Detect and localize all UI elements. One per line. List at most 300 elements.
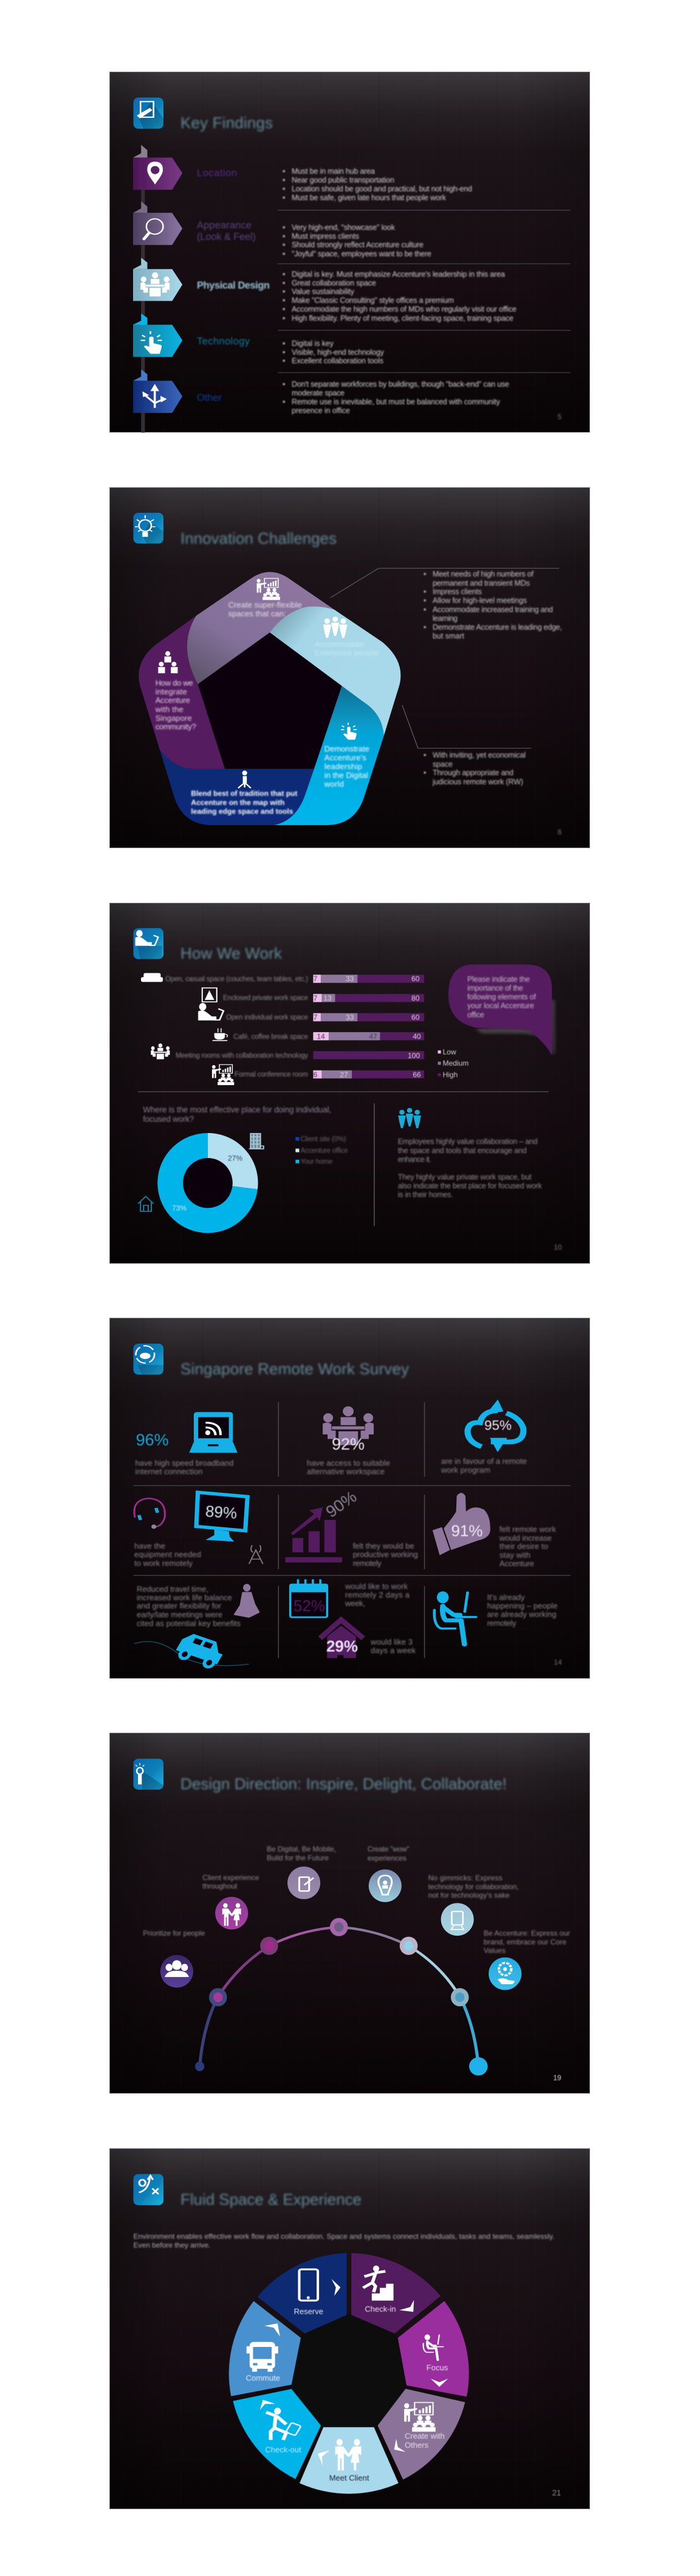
bullet lists: Visible, high-end technology bbox=[292, 348, 385, 357]
survey captions: would increase bbox=[499, 1533, 552, 1543]
arc labels: experiences bbox=[368, 1854, 407, 1862]
wheel labels bbox=[246, 2304, 448, 2482]
survey captions: their desire to bbox=[499, 1542, 548, 1551]
icon: touch bbox=[341, 723, 357, 740]
bar row labels: Enclosed private work space bbox=[223, 995, 308, 1002]
icon: chair person bbox=[238, 770, 251, 788]
icon: calendar bbox=[289, 1579, 328, 1617]
speech bubble text: importance of the bbox=[467, 984, 523, 992]
icon: coffee cup bbox=[213, 1028, 227, 1041]
category labels: Location bbox=[197, 168, 237, 179]
segment labels: Accenture's bbox=[324, 753, 366, 762]
page number: 10 bbox=[554, 1243, 562, 1252]
circle: people bbox=[160, 1955, 193, 1988]
wheel segment: focus bbox=[398, 2301, 469, 2397]
arc labels bbox=[143, 1845, 570, 1955]
callout bullets: judicious remote work (RW) bbox=[432, 778, 523, 786]
survey captions: remotely bbox=[487, 1619, 516, 1628]
callout bullets bbox=[424, 570, 562, 786]
segment labels: Accommodate bbox=[315, 639, 364, 648]
wheel segment: commute bbox=[229, 2301, 301, 2396]
intro text: Even before they arrive. bbox=[134, 2241, 210, 2250]
arc labels: Values bbox=[484, 1947, 506, 1955]
slide 5: design direction bbox=[109, 1733, 590, 2094]
slide 3 drawn shapes bbox=[133, 928, 555, 1233]
donut question bbox=[143, 1105, 331, 1123]
segment labels: leadership bbox=[324, 762, 362, 771]
header icon: document and pencil bbox=[133, 97, 163, 129]
title: Key Findings bbox=[180, 114, 273, 132]
bar values: 7 bbox=[314, 1013, 318, 1022]
donut legend labels bbox=[300, 1136, 348, 1165]
icon: house bbox=[318, 1616, 365, 1658]
bullet lists: • bbox=[283, 167, 285, 176]
legend labels: Medium bbox=[443, 1059, 468, 1067]
legend labels: High bbox=[443, 1070, 458, 1079]
bar row labels: Meeting rooms with collaboration technology bbox=[176, 1052, 308, 1060]
bullet lists: • bbox=[283, 250, 285, 258]
pentagon segment: purple bbox=[139, 615, 225, 769]
legend squares bbox=[438, 1050, 441, 1077]
takeaway text: enhance it. bbox=[398, 1155, 431, 1163]
bullet lists: Must impress clients bbox=[292, 232, 359, 241]
wheel labels: Commute bbox=[246, 2373, 280, 2382]
bullet lists: Accommodate the high numbers of MDs who regularly visit our office bbox=[292, 305, 516, 313]
bullet lists: "Joyful" space, employees want to be there bbox=[292, 250, 431, 258]
legend labels: Low bbox=[443, 1048, 456, 1057]
icon: presenter bbox=[257, 578, 280, 600]
callout bullets: Through appropriate and bbox=[433, 769, 513, 777]
speech bubble text bbox=[467, 975, 537, 1019]
survey captions: would like 3 bbox=[370, 1637, 413, 1646]
callout bullets: • bbox=[424, 605, 426, 614]
slide 6: fluid space and experience bbox=[109, 2148, 590, 2509]
bar values: 7 bbox=[314, 975, 318, 983]
bullet lists: Must be safe, given late hours that people work bbox=[292, 193, 447, 202]
callout connector lines bbox=[331, 568, 559, 748]
segment labels bbox=[155, 600, 379, 815]
bullet lists: • bbox=[283, 305, 285, 313]
segment labels: Enterprise people bbox=[315, 648, 379, 657]
icon: sofa bbox=[141, 973, 163, 982]
takeaway text bbox=[398, 1137, 542, 1199]
callout bullets: • bbox=[424, 769, 426, 777]
callout bullets: Allow for high-level meetings bbox=[433, 597, 527, 605]
survey captions: are already working bbox=[487, 1610, 557, 1619]
wheel labels: Check-in bbox=[365, 2304, 396, 2314]
tag: other bbox=[133, 369, 182, 413]
bullet lists: • bbox=[283, 185, 285, 193]
wheel labels: Others bbox=[405, 2441, 429, 2450]
slide 5 background bbox=[109, 1733, 590, 2094]
survey captions: week, bbox=[345, 1599, 365, 1608]
segment labels: Accenture on the map with bbox=[191, 798, 284, 807]
donut chart bbox=[157, 1133, 258, 1233]
icon: presenter bbox=[212, 1064, 234, 1085]
page number: 21 bbox=[552, 2489, 561, 2498]
category labels: (Look & Feel) bbox=[197, 231, 256, 242]
title: Design Direction: Inspire, Delight, Collaborate! bbox=[180, 1775, 507, 1793]
segment labels: world bbox=[324, 779, 344, 789]
segment labels: Blend best of tradition that put bbox=[191, 789, 297, 798]
pentagon segment: navy bbox=[160, 750, 314, 825]
bar values: 80 bbox=[411, 994, 420, 1002]
intro text bbox=[134, 2232, 554, 2250]
bullet lists: Great collaboration space bbox=[292, 279, 376, 287]
bar row labels: Open, casual space (couches, team tables, etc.) bbox=[165, 976, 308, 983]
survey captions: days a week bbox=[371, 1646, 416, 1655]
title: How We Work bbox=[180, 944, 283, 962]
bar values: 7 bbox=[314, 994, 318, 1002]
icon: office building bbox=[249, 1134, 264, 1149]
bullet lists: presence in office bbox=[292, 406, 350, 415]
bullet lists: • bbox=[283, 357, 285, 365]
slide 5 drawn shapes bbox=[133, 1759, 521, 2075]
callout bullets: Impress clients bbox=[433, 587, 482, 596]
segment labels: Demonstrate bbox=[324, 744, 369, 753]
survey captions: are in favour of a remote bbox=[441, 1457, 527, 1466]
grid dividers bbox=[133, 1402, 571, 1658]
slide 4 background bbox=[109, 1318, 590, 1679]
donut legend labels: Client site (0%) bbox=[300, 1136, 346, 1143]
slide 2: innovation challenges bbox=[109, 487, 590, 848]
pentagon segment: light blue bbox=[270, 606, 400, 736]
tag: technology bbox=[133, 313, 182, 357]
survey captions: felt they would be bbox=[353, 1541, 414, 1550]
bullet lists: • bbox=[283, 270, 285, 278]
category labels: Physical Design bbox=[197, 280, 270, 291]
arc labels: brand, embrace our Core bbox=[484, 1937, 566, 1946]
segment labels: with the bbox=[155, 705, 184, 714]
bullet lists: Value sustainability bbox=[292, 287, 355, 296]
page number: 6 bbox=[558, 827, 562, 836]
category labels: Other bbox=[197, 392, 222, 403]
slide 3: how we work bbox=[109, 903, 590, 1264]
bar values: 100 bbox=[408, 1051, 420, 1060]
bar row labels: Café, coffee break space bbox=[233, 1033, 308, 1041]
pentagon segment: lilac bbox=[187, 572, 334, 684]
slide 2 text bbox=[155, 529, 562, 836]
circle: handshake bbox=[215, 1897, 248, 1930]
donut values: 73% bbox=[172, 1204, 187, 1213]
statistics: 95% bbox=[484, 1418, 512, 1433]
slide 1: key findings bbox=[109, 72, 590, 433]
takeaway text: also indicate the best place for focused work bbox=[398, 1182, 542, 1190]
arc labels: Be Accenture: Express our bbox=[484, 1929, 570, 1937]
callout bullets: • bbox=[424, 751, 426, 759]
arc nodes bbox=[195, 1918, 488, 2075]
bullet lists: Should strongly reflect Accenture culture bbox=[292, 241, 424, 249]
arc labels: Client experience bbox=[202, 1873, 259, 1882]
callout bullets: Accommodate increased training and bbox=[433, 605, 553, 614]
segment labels: leading edge space and tools bbox=[191, 807, 293, 815]
survey captions: stay with bbox=[499, 1550, 530, 1560]
callout bullets: • bbox=[424, 623, 426, 632]
survey captions: to work remotely bbox=[134, 1559, 193, 1568]
arc labels: throughout bbox=[202, 1882, 238, 1891]
survey captions: productive working bbox=[353, 1550, 418, 1559]
icon: laptop with wifi bbox=[189, 1412, 238, 1453]
donut question: Where is the most effective place for doing individual, bbox=[143, 1105, 331, 1114]
statistics: 52% bbox=[293, 1597, 325, 1615]
segment labels: How do we bbox=[156, 678, 193, 687]
speech bubble text: office bbox=[467, 1010, 484, 1019]
bullet lists: • bbox=[283, 380, 285, 389]
takeaway text: the space and tools that encourage and bbox=[398, 1146, 527, 1155]
tag: physical design bbox=[133, 258, 182, 301]
bullet lists: Near good public transportation bbox=[292, 176, 394, 185]
title: Fluid Space & Experience bbox=[180, 2190, 362, 2208]
wheel labels: Focus bbox=[427, 2363, 448, 2372]
bullet lists bbox=[283, 167, 516, 415]
wheel segment: reserve bbox=[258, 2253, 347, 2334]
timeline spine bbox=[141, 152, 145, 433]
bullet lists: • bbox=[283, 241, 285, 249]
icon: cloud with arrows bbox=[467, 1400, 523, 1451]
callout bullets: • bbox=[424, 587, 426, 596]
icon: growth chart bbox=[285, 1507, 342, 1563]
bullet lists: • bbox=[283, 287, 285, 296]
statistics: 96% bbox=[136, 1431, 169, 1449]
speech bubble text: your local Accenture bbox=[467, 1002, 534, 1010]
header icon: person with laptop bbox=[133, 928, 163, 959]
bar values: 66 bbox=[413, 1070, 421, 1079]
survey captions: work program bbox=[441, 1465, 490, 1475]
icon: person with laptop bbox=[198, 1003, 224, 1021]
intro text: Environment enables effective work flow and collaboration. Space and systems connect individuals, tasks and teams, seamlessly. bbox=[134, 2232, 554, 2241]
callout bullets: • bbox=[424, 570, 426, 578]
bullet lists: High flexibility. Plenty of meeting, client-facing space, training space bbox=[292, 314, 513, 323]
callout bullets: space bbox=[433, 760, 453, 769]
survey captions: remotely bbox=[353, 1558, 382, 1567]
slide 3 text bbox=[143, 944, 562, 1252]
slide 1 drawn shapes bbox=[133, 97, 571, 433]
bullet lists: • bbox=[283, 296, 285, 305]
icon: headset bbox=[134, 1498, 165, 1529]
icon: meditating person bbox=[233, 1584, 260, 1618]
bar values: 27 bbox=[340, 1070, 348, 1079]
bullet lists: • bbox=[283, 348, 285, 357]
slide 4: singapore remote work survey bbox=[109, 1318, 590, 1679]
wheel center bbox=[289, 2314, 409, 2429]
icon: framed picture bbox=[202, 988, 217, 1002]
survey captions: felt remote work bbox=[499, 1525, 557, 1534]
icon: house outline bbox=[138, 1196, 154, 1211]
bullet lists: Make "Classic Consulting" style offices a premium bbox=[292, 296, 454, 305]
bullet lists: • bbox=[283, 279, 285, 287]
speech bubble bbox=[448, 964, 555, 1055]
slide 2 background bbox=[109, 487, 590, 848]
donut values: 27% bbox=[228, 1154, 242, 1162]
circle: tablet bbox=[441, 1903, 474, 1936]
arc labels: not for technology's sake bbox=[428, 1891, 510, 1900]
arc labels: Be Digital, Be Mobile, bbox=[267, 1845, 336, 1854]
survey captions: cited as potential key benefits bbox=[137, 1619, 241, 1628]
bullet lists: moderate space bbox=[292, 389, 345, 397]
donut legend squares bbox=[295, 1137, 299, 1163]
title: Innovation Challenges bbox=[180, 529, 337, 547]
icon: thumbs up bbox=[433, 1493, 490, 1555]
survey captions: Reduced travel time, bbox=[137, 1584, 208, 1594]
bar row labels: Open individual work space bbox=[226, 1014, 308, 1021]
bullet lists: Digital is key bbox=[292, 340, 334, 348]
bullet lists: • bbox=[283, 193, 285, 202]
speech bubble text: following elements of bbox=[467, 993, 537, 1001]
survey captions: Accenture bbox=[499, 1559, 534, 1568]
pentagon center bbox=[198, 632, 342, 769]
survey captions: and greater flexibility for bbox=[137, 1601, 222, 1611]
wheel segment: check-in bbox=[351, 2253, 441, 2334]
survey captions: happening – people bbox=[487, 1601, 558, 1610]
survey captions: have high speed broadband bbox=[135, 1458, 233, 1467]
donut question: focused work? bbox=[143, 1114, 194, 1123]
bullet lists: Must be in main hub area bbox=[292, 167, 375, 176]
tag: location bbox=[133, 145, 182, 190]
donut legend labels: Your home bbox=[300, 1158, 333, 1165]
bar values: 47 bbox=[369, 1032, 377, 1041]
circle: bulb bbox=[369, 1869, 402, 1902]
survey captions: have the bbox=[134, 1541, 165, 1550]
segment labels: in the Digital bbox=[324, 771, 368, 780]
survey captions: early/late meetings were bbox=[137, 1610, 222, 1619]
survey captions: would like to work bbox=[345, 1581, 408, 1591]
icon: signal tower bbox=[249, 1545, 263, 1564]
slide 2 drawn shapes bbox=[133, 513, 559, 825]
title: Singapore Remote Work Survey bbox=[180, 1360, 409, 1378]
segment labels: Accenture bbox=[156, 696, 190, 705]
divider lines bbox=[278, 210, 571, 372]
callout bullets: learning bbox=[433, 614, 458, 623]
wheel segment: create with others bbox=[378, 2389, 465, 2479]
bullet lists: Remote use is inevitable, but must be balanced with community bbox=[292, 397, 501, 406]
wheel labels: Check-out bbox=[265, 2445, 301, 2454]
icon: person at desk bbox=[434, 1591, 476, 1645]
bar row labels bbox=[165, 976, 308, 1078]
arc timeline bbox=[200, 1927, 478, 2066]
callout bullets: With inviting, yet economical bbox=[433, 751, 526, 759]
category labels: Technology bbox=[197, 336, 250, 347]
takeaway text: Employees highly value collaboration – and bbox=[398, 1137, 538, 1146]
segment labels: community? bbox=[156, 722, 196, 731]
pentagon segment: bright blue bbox=[274, 685, 384, 825]
callout bullets: Meet needs of high numbers of bbox=[433, 570, 534, 578]
icon: tilted monitor bbox=[196, 1492, 247, 1541]
page number: 5 bbox=[558, 413, 562, 421]
statistics: 90% bbox=[323, 1487, 360, 1521]
slide 4 text bbox=[134, 1360, 562, 1667]
slide 6 background bbox=[109, 2148, 590, 2509]
bullet lists: • bbox=[283, 176, 285, 185]
bullet lists: • bbox=[283, 340, 285, 348]
arc labels: Create "wow" bbox=[368, 1845, 410, 1854]
category labels: Appearance bbox=[197, 220, 252, 231]
callout bullets: Demonstrate Accenture is leading edge, bbox=[433, 623, 562, 632]
takeaway text: is in their homes. bbox=[398, 1191, 453, 1199]
header icon: zero x arrow bbox=[133, 2174, 163, 2205]
page number: 19 bbox=[553, 2074, 561, 2082]
category labels bbox=[197, 168, 270, 403]
arc labels: Build for the Future bbox=[267, 1854, 329, 1862]
bar values: 14 bbox=[317, 1032, 325, 1041]
icon: people group bbox=[323, 617, 348, 638]
slide 3 background bbox=[109, 903, 590, 1264]
statistics: 92% bbox=[332, 1435, 365, 1453]
icon: blue team bbox=[398, 1108, 421, 1128]
survey captions: increased work life balance bbox=[137, 1593, 232, 1602]
arc labels: Prioritize for people bbox=[143, 1929, 205, 1937]
circle: gear and hand bbox=[489, 1958, 521, 1990]
donut values bbox=[172, 1154, 242, 1213]
survey captions: remotely 2 days a bbox=[345, 1591, 410, 1599]
wheel segment: meet client bbox=[300, 2427, 399, 2494]
divider lines bbox=[138, 1092, 549, 1226]
legend labels bbox=[443, 1048, 468, 1079]
callout bullets: but smart bbox=[433, 632, 465, 640]
slide 6 text bbox=[134, 2190, 561, 2498]
bullet lists: Don't separate workforces by buildings, though "back-end" can use bbox=[292, 380, 509, 389]
survey captions bbox=[134, 1457, 558, 1655]
segment labels: Singapore bbox=[156, 713, 192, 723]
icon: meeting lilac bbox=[323, 1406, 374, 1445]
segment labels: Create super-flexible bbox=[228, 600, 302, 609]
tag: appearance bbox=[133, 201, 182, 245]
statistics: 29% bbox=[326, 1637, 358, 1655]
bullet lists: Digital is key. Must emphasize Accenture's leadership in this area bbox=[292, 270, 505, 278]
slide 1 background bbox=[109, 72, 590, 433]
wheel labels: Meet Client bbox=[329, 2473, 369, 2482]
arc labels: No gimmicks: Express bbox=[428, 1874, 503, 1882]
bar values: 40 bbox=[413, 1032, 421, 1041]
takeaway text: They highly value private work space, but bbox=[398, 1173, 532, 1182]
callout bullets: permanent and transient MDs bbox=[433, 579, 530, 587]
bar values: 60 bbox=[411, 1013, 420, 1022]
bullet lists: • bbox=[283, 397, 285, 406]
page number: 14 bbox=[554, 1658, 562, 1667]
segment labels: integrate bbox=[156, 687, 187, 696]
bar values bbox=[314, 975, 421, 1079]
bar values: 60 bbox=[411, 975, 420, 983]
circle: mobile bbox=[287, 1866, 320, 1899]
bar row labels: Formal conference room bbox=[235, 1071, 308, 1078]
bullet lists: Very high-end, "showcase" look bbox=[292, 223, 396, 231]
donut legend labels: Accenture office bbox=[300, 1147, 348, 1154]
callout bullets: • bbox=[424, 597, 426, 605]
slide 5 text bbox=[143, 1775, 570, 2082]
icon: car on road bbox=[134, 1631, 249, 1671]
bar values: 13 bbox=[323, 994, 332, 1002]
bullet lists: Location should be good and practical, but not high-end bbox=[292, 185, 472, 193]
slide 1 text bbox=[180, 114, 562, 421]
header icon: cloud sync bbox=[133, 1344, 163, 1375]
slide 6 drawn shapes bbox=[133, 2174, 469, 2494]
bullet lists: Excellent collaboration tools bbox=[292, 357, 383, 365]
speech bubble text: Please indicate the bbox=[467, 975, 530, 984]
bullet lists: • bbox=[283, 223, 285, 231]
header icon: light bulb bbox=[133, 513, 163, 544]
survey captions: have access to suitable bbox=[307, 1458, 390, 1467]
bullet lists: • bbox=[283, 314, 285, 323]
survey captions: internet connection bbox=[135, 1467, 203, 1476]
segment labels: spaces that can: bbox=[228, 609, 286, 618]
statistics: 91% bbox=[451, 1522, 483, 1540]
bar values: 6 bbox=[314, 1070, 318, 1079]
survey captions: It's already bbox=[487, 1593, 525, 1601]
wheel segment: check-out bbox=[233, 2389, 321, 2479]
arc labels: technology for collaboration, bbox=[428, 1882, 519, 1891]
stacked bar chart bbox=[313, 975, 424, 1078]
bullet lists: • bbox=[283, 232, 285, 241]
wheel labels: Reserve bbox=[294, 2307, 323, 2316]
